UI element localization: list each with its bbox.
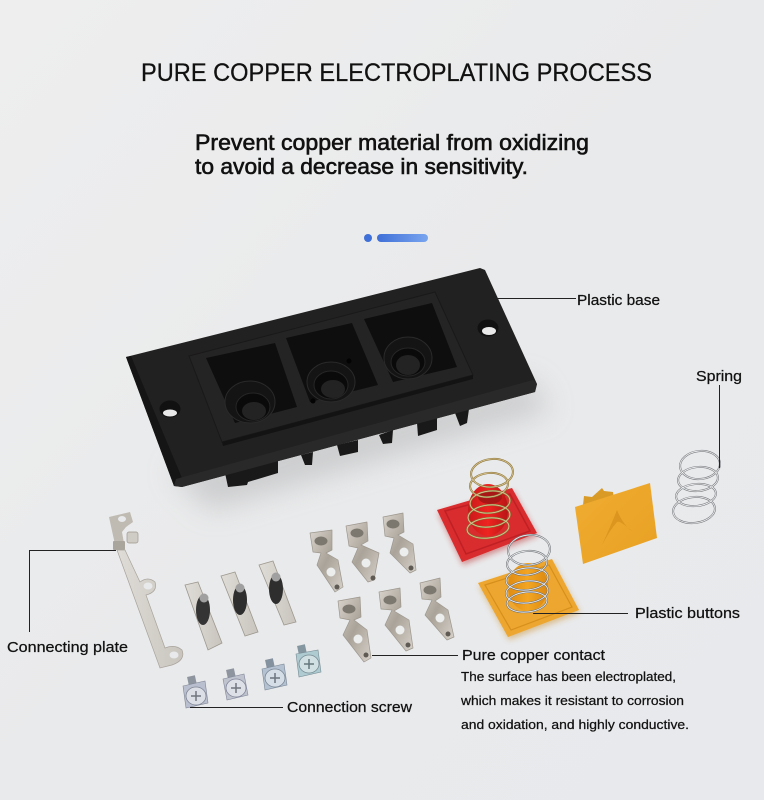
base legs bbox=[225, 409, 469, 487]
label: connection screw: Connection screw bbox=[287, 699, 412, 716]
label: connecting plate: Connecting plate bbox=[7, 639, 128, 656]
pure copper contacts bbox=[310, 513, 454, 662]
subtitle bbox=[195, 130, 589, 179]
contact 6 bbox=[420, 578, 454, 640]
callout: pure copper contact: which makes it resistant to corrosion bbox=[460, 693, 684, 708]
strip 1 bbox=[185, 582, 222, 650]
yellow plastic button with silver spring bbox=[478, 533, 580, 640]
raised frame bbox=[189, 292, 473, 442]
strip 2 bbox=[221, 572, 258, 636]
screw 1 bbox=[183, 675, 208, 708]
screw 3 bbox=[262, 658, 287, 690]
base top face bbox=[126, 268, 537, 487]
soft shadow under plastic base bbox=[170, 380, 550, 510]
red plastic button with gold spring bbox=[437, 457, 538, 565]
window left bbox=[206, 343, 297, 423]
label: plastic base: Plastic base bbox=[577, 292, 660, 309]
title: PURE COPPER ELECTROPLATING PROCESS bbox=[141, 59, 652, 87]
subtitle: to avoid a decrease in sensitivity. bbox=[195, 154, 528, 179]
contact holes and rivets bbox=[314, 520, 450, 658]
screw 4 bbox=[296, 644, 321, 677]
callout: pure copper contact: The surface has been electroplated, bbox=[461, 669, 676, 684]
yellow plastic button cap bbox=[575, 483, 657, 564]
contact 1 bbox=[310, 530, 343, 592]
screw terminal strips bbox=[185, 561, 296, 650]
screw 2 bbox=[223, 668, 248, 700]
gold spring bbox=[466, 457, 514, 540]
left bevel bbox=[126, 356, 182, 486]
contact 3 bbox=[383, 513, 416, 573]
window centre bbox=[286, 323, 378, 404]
loose spring bbox=[672, 449, 721, 525]
window right bbox=[364, 303, 457, 382]
connection screws bbox=[183, 644, 321, 708]
plastic base bbox=[126, 268, 537, 487]
contact 2 bbox=[346, 522, 379, 582]
subtitle: Prevent copper material from oxidizing bbox=[195, 130, 589, 155]
connecting plate bbox=[109, 512, 183, 668]
contact 5 bbox=[379, 588, 413, 651]
callout: pure copper contact bbox=[460, 647, 689, 732]
silver spring bbox=[505, 533, 551, 614]
callout: pure copper contact: Pure copper contact bbox=[462, 647, 606, 664]
front bevel bbox=[174, 380, 537, 487]
callout: pure copper contact: and oxidation, and highly conductive. bbox=[461, 717, 689, 732]
leader lines bbox=[30, 298, 720, 708]
mounting hole left bbox=[160, 400, 180, 418]
contact 4 bbox=[338, 597, 371, 662]
mounting hole right bbox=[478, 320, 498, 336]
strip 3 bbox=[259, 561, 296, 625]
decorative blue progress marker bbox=[364, 234, 428, 242]
label: spring: Spring bbox=[696, 368, 742, 385]
label: plastic buttons: Plastic buttons bbox=[635, 605, 740, 622]
